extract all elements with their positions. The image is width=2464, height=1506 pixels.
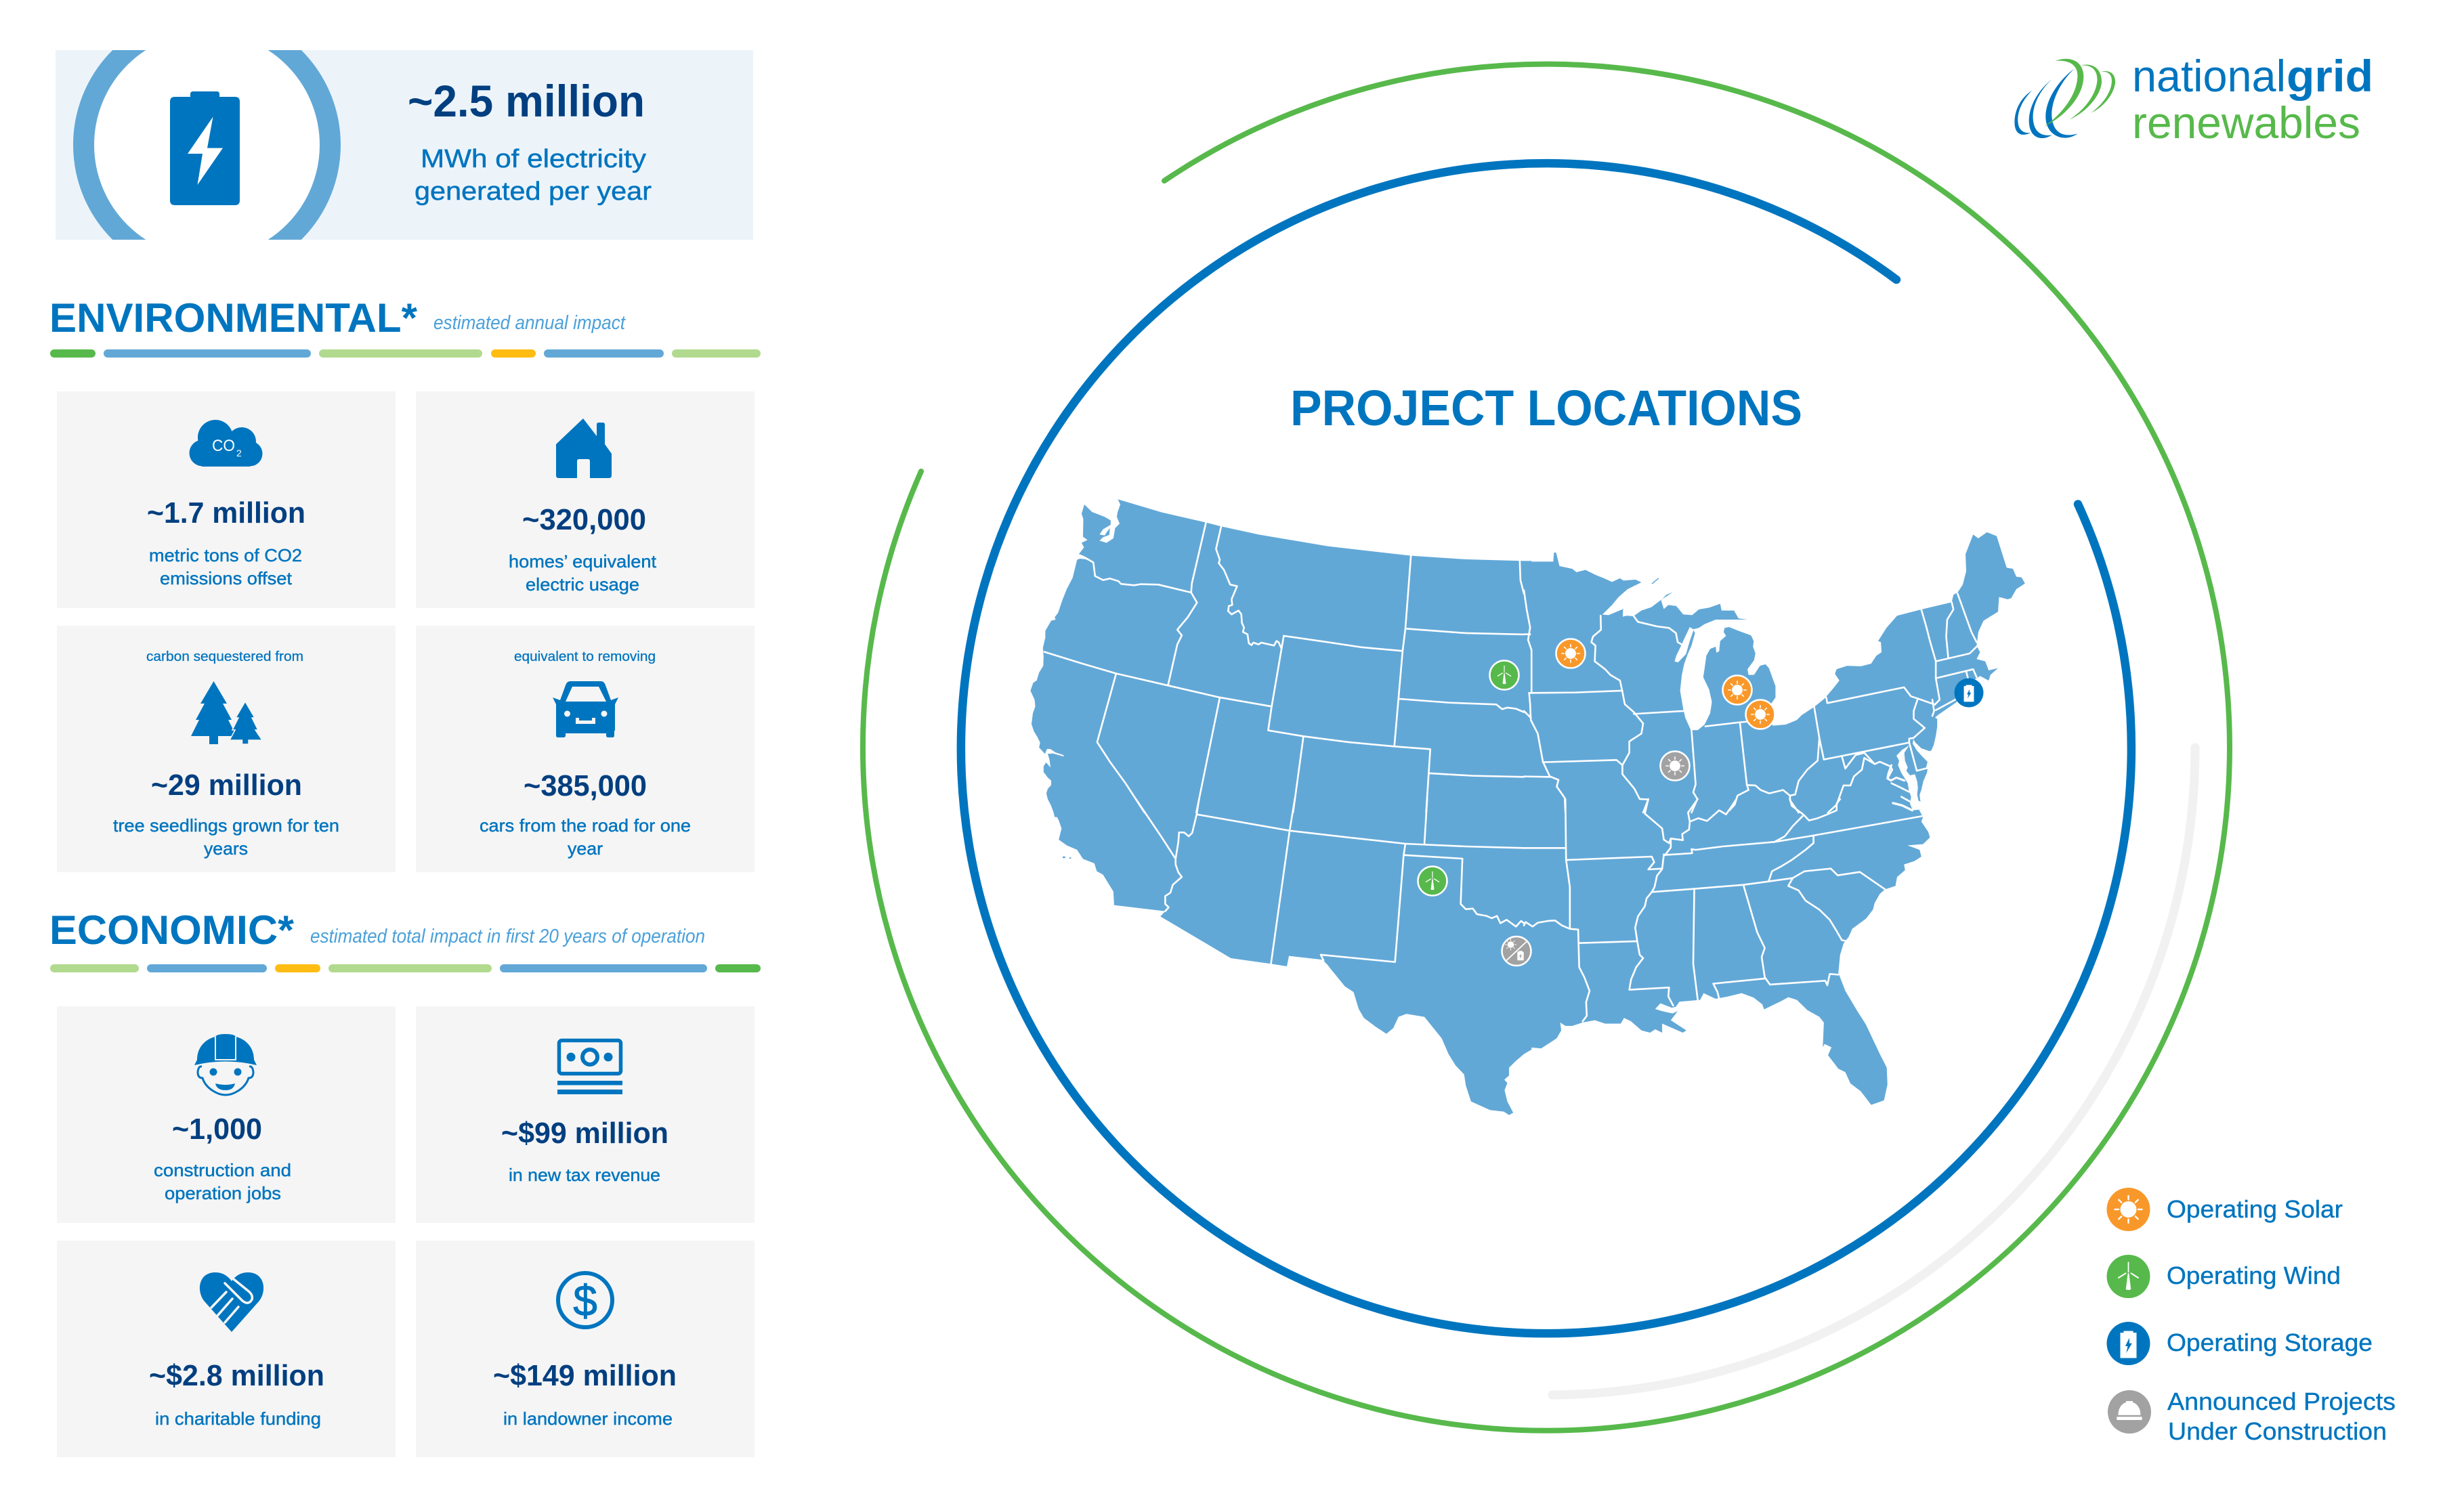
- description: [113, 815, 339, 859]
- marker: announced solar, Illinois: [1661, 752, 1689, 780]
- description: electric usage: [526, 574, 639, 595]
- icon: handshake heart: [200, 1272, 263, 1332]
- icon: dollar coin: $: [573, 1276, 597, 1325]
- description: construction and: [154, 1160, 291, 1180]
- logo wordmark: [2132, 51, 2373, 148]
- icon: CO2 cloud: [190, 420, 263, 467]
- legend label: solar: Operating Solar: [2167, 1195, 2343, 1223]
- divider bar: economic: [50, 964, 761, 972]
- panel: CO2 offset: [57, 391, 396, 608]
- logo wordmark: grid: [2287, 51, 2373, 101]
- logo wordmark: national: [2132, 51, 2286, 101]
- arc: blue ring: [961, 163, 2131, 1333]
- description: [149, 545, 302, 588]
- map: Long Island Sound and Hudson: [1932, 700, 1955, 716]
- panel: cars: [416, 626, 755, 872]
- heading: economic: ECONOMIC*: [49, 907, 295, 953]
- heading: economic: [49, 907, 705, 953]
- banner description: [415, 145, 652, 206]
- map fill north-east: [1517, 532, 2025, 817]
- icon: house: [556, 418, 612, 478]
- state borders: north-east: [1524, 590, 1976, 813]
- icon: CO2 cloud: CO: [212, 437, 235, 455]
- map fill south-east: [1517, 794, 1930, 1105]
- banner figure: ~2.5 million: [408, 76, 645, 126]
- map: Chesapeake Bay and tributaries: [1888, 746, 1928, 817]
- legend icon: storage: [2106, 1322, 2150, 1365]
- ring around battery: [73, 50, 341, 240]
- legend label: announced projects: Under Construction: [2168, 1417, 2387, 1445]
- description: in new tax revenue: [509, 1165, 660, 1185]
- arc: outer green ring: [863, 64, 2230, 1431]
- lead-in text: equivalent to removing: [514, 649, 656, 664]
- marker: wind, Oklahoma: [1418, 867, 1447, 895]
- heading: economic: estimated total impact in first 20 years of operation: [310, 926, 705, 947]
- description: operation jobs: [165, 1183, 281, 1203]
- description: homes’ equivalent: [509, 551, 657, 572]
- lead-in text: carbon sequestered from: [146, 649, 303, 664]
- icon: dollar coin: [558, 1273, 612, 1327]
- figure: ~320,000: [522, 503, 646, 536]
- legend icon: wind: [2106, 1255, 2150, 1298]
- divider bar: environmental: [50, 349, 761, 358]
- description: years: [204, 838, 248, 859]
- figure: ~$99 million: [501, 1117, 668, 1150]
- figure: ~$2.8 million: [149, 1359, 324, 1392]
- figure: ~29 million: [151, 769, 302, 802]
- figure: ~1.7 million: [147, 496, 305, 530]
- panel: charitable funding: [57, 1241, 396, 1457]
- icon: construction worker: [194, 1034, 257, 1095]
- legend icon: announced projects: [2108, 1390, 2151, 1434]
- map fill south-west: [1049, 794, 1531, 1115]
- state borders: north-west: [1044, 523, 1524, 813]
- description: in charitable funding: [155, 1408, 321, 1429]
- state borders: south-west: [1136, 799, 1524, 964]
- marker: storage, Long Island: [1955, 679, 1983, 707]
- description: emissions offset: [160, 568, 293, 588]
- heading: environmental: estimated annual impact: [433, 312, 626, 334]
- marker: wind, South Dakota: [1490, 661, 1518, 689]
- marker: solar, Minnesota: [1556, 639, 1585, 668]
- marker: announced solar and storage, Texas: [1502, 937, 1531, 966]
- description: year: [568, 838, 603, 859]
- icon: car: [553, 681, 618, 737]
- banner description: MWh of electricity: [421, 145, 646, 173]
- legend label: announced projects: Announced Projects: [2167, 1387, 2396, 1415]
- legend label: storage: Operating Storage: [2167, 1329, 2373, 1356]
- marker: solar, Michigan south: [1746, 700, 1775, 729]
- icon: trees: [191, 681, 262, 744]
- panel: jobs: [57, 1006, 396, 1223]
- logo: [2014, 51, 2373, 148]
- map fill north-west: [1030, 499, 1531, 817]
- marker: solar, Michigan: [1723, 676, 1751, 704]
- panel: tree seedlings: [57, 626, 396, 872]
- map: contiguous United States: [1030, 499, 2025, 1115]
- logo mark: [2014, 59, 2115, 138]
- icon: CO2 cloud: 2: [236, 448, 242, 458]
- icon: banknote: [557, 1040, 622, 1094]
- panel: generation banner: [56, 50, 753, 240]
- figure: ~1,000: [172, 1113, 262, 1146]
- description: metric tons of CO2: [149, 545, 302, 565]
- description: in landowner income: [503, 1408, 673, 1429]
- description: tree seedlings grown for ten: [113, 815, 339, 836]
- legend: [2106, 1188, 2396, 1445]
- legend icon: solar: [2106, 1188, 2150, 1231]
- legend label: wind: Operating Wind: [2167, 1262, 2341, 1289]
- figure: ~$149 million: [493, 1359, 677, 1392]
- icon: lightning bolt: [188, 116, 223, 185]
- heading: environmental: [49, 295, 626, 341]
- banner description: generated per year: [415, 177, 652, 206]
- title: PROJECT LOCATIONS: [1290, 380, 1802, 436]
- panel: homes: [416, 391, 755, 608]
- panel: tax revenue: [416, 1006, 755, 1223]
- arc: pale grey ring: [1552, 748, 2195, 1395]
- description: [480, 815, 691, 859]
- icon: battery: [170, 91, 240, 205]
- description: cars from the road for one: [480, 815, 691, 836]
- heading: environmental: ENVIRONMENTAL*: [49, 295, 418, 341]
- legend label: announced projects: [2167, 1387, 2396, 1445]
- figure: ~385,000: [524, 769, 647, 802]
- panel: landowner income: [416, 1241, 755, 1457]
- state borders: south-east: [1524, 799, 1923, 1021]
- logo wordmark: renewables: [2132, 98, 2360, 148]
- description: [509, 551, 657, 595]
- description: [154, 1160, 291, 1203]
